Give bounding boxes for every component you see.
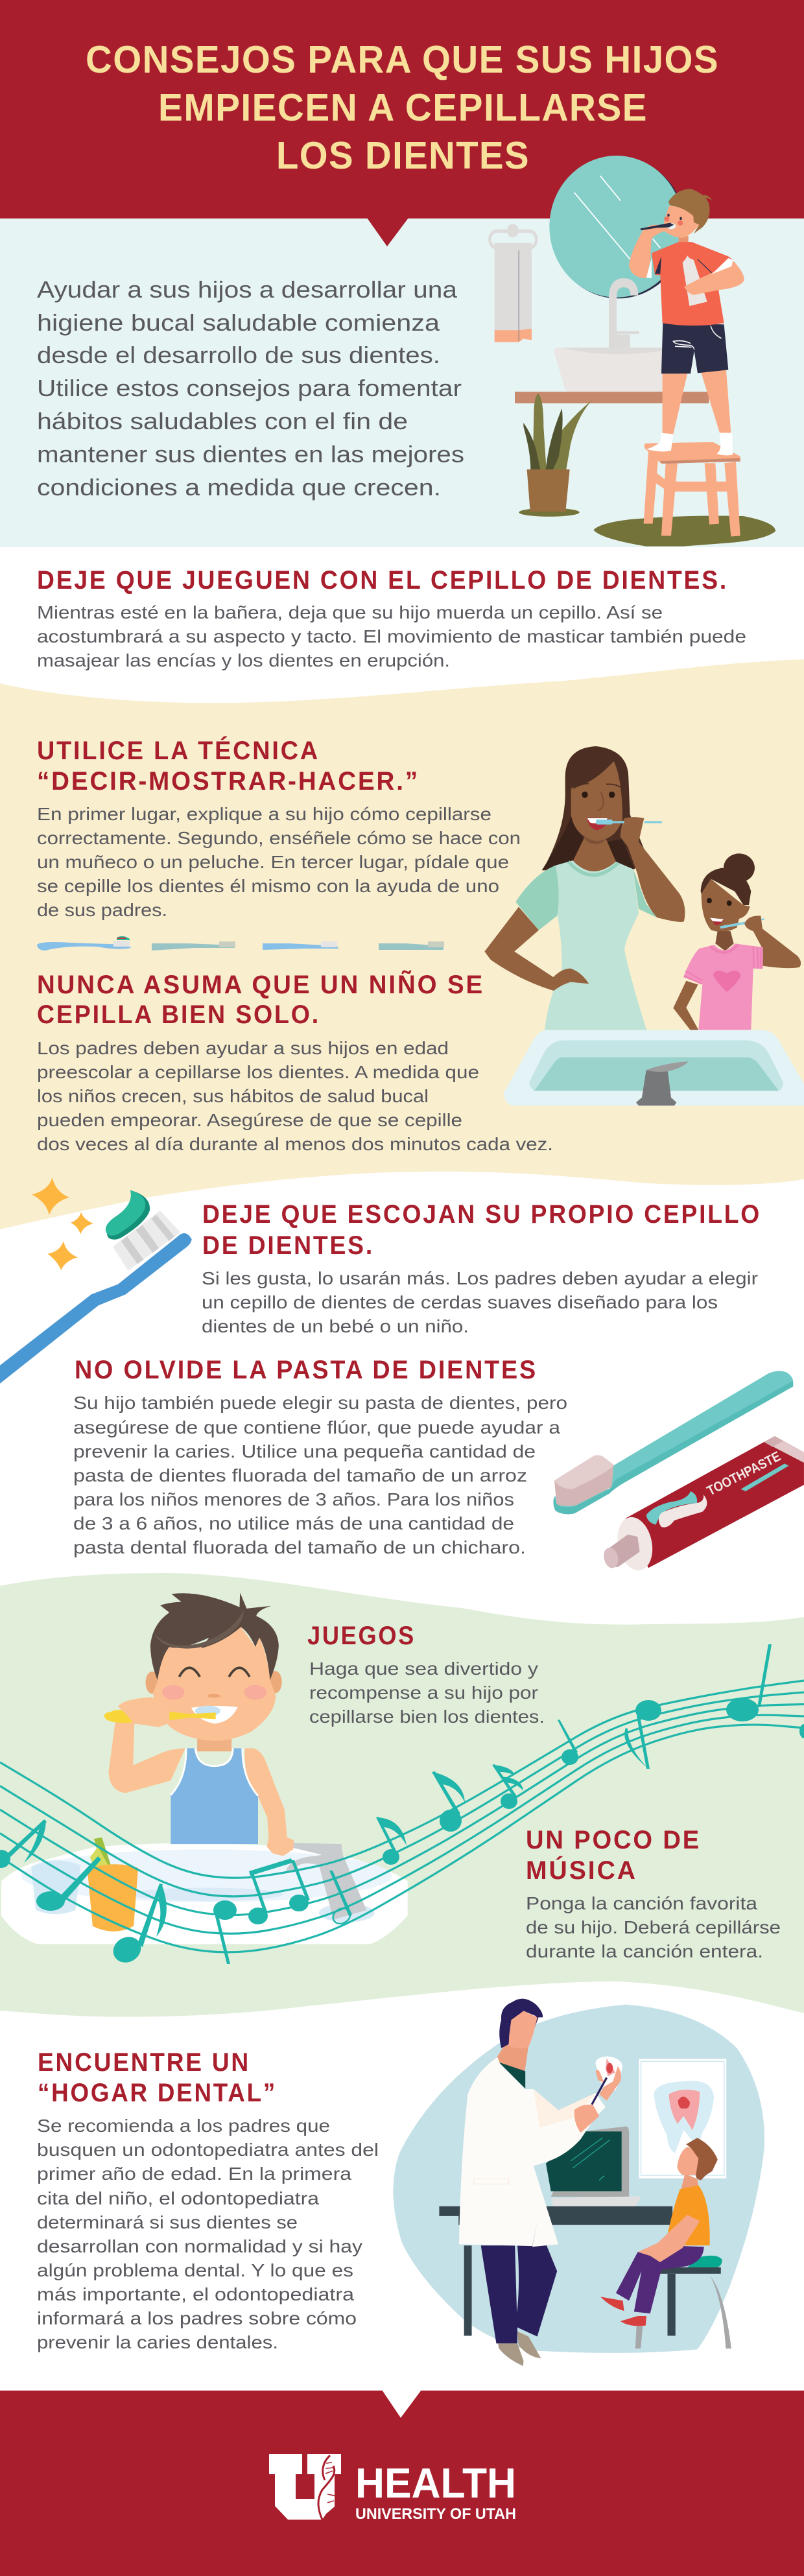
text block: pasta dental fluorada del tamaño de un chicharo. bbox=[73, 1537, 526, 1557]
intro text: higiene bucal saludable comienza bbox=[37, 309, 440, 336]
music notes bbox=[0, 1644, 804, 1967]
character: child on stool bbox=[600, 2138, 731, 2348]
text block: prevenir la caries dentales. bbox=[37, 2332, 278, 2352]
character: dentist bbox=[459, 1999, 622, 2366]
illustration: mother and daughter brushing at sink bbox=[484, 746, 804, 1105]
logo: HEALTH wordmark: HEALTH bbox=[355, 2459, 516, 2507]
panel: don't forget the toothpaste bbox=[73, 1356, 567, 1557]
heading bbox=[526, 1826, 701, 1885]
heading: UTILICE LA TÉCNICA bbox=[37, 736, 320, 765]
text block: más importante, el odontopediatra bbox=[37, 2284, 354, 2304]
text block: primer año de edad. En la primera bbox=[37, 2164, 351, 2184]
text block bbox=[202, 1268, 758, 1336]
text block: cepillarse bien los dientes. bbox=[309, 1707, 545, 1727]
heading: UN POCO DE bbox=[526, 1826, 701, 1854]
text block: determinará si sus dientes se bbox=[37, 2212, 298, 2232]
panel: music bbox=[526, 1826, 781, 1961]
illustration: boy brushing at bathroom mirror bbox=[490, 156, 775, 547]
text block bbox=[37, 2116, 379, 2352]
text block: masajear las encías y los dientes en erupción. bbox=[37, 650, 450, 670]
title: EMPIECEN A CEPILLARSE bbox=[158, 86, 648, 129]
illustration: dentist showing tooth to child bbox=[393, 1999, 764, 2366]
text block: En primer lugar, explique a su hijo cómo cepillarse bbox=[37, 804, 491, 824]
heading: DE DIENTES. bbox=[202, 1231, 374, 1260]
text block: pasta de dientes fluorada del tamaño de un arroz bbox=[73, 1465, 527, 1485]
text block: Su hijo también puede elegir su pasta de dientes, pero bbox=[73, 1393, 567, 1413]
text block: informará a los padres sobre cómo bbox=[37, 2308, 357, 2328]
icon: stool bbox=[644, 442, 740, 537]
panel: tell-show-do bbox=[37, 736, 521, 920]
intro text: condiciones a medida que crecen. bbox=[37, 474, 441, 501]
heading: CEPILLA BIEN SOLO. bbox=[37, 1000, 320, 1029]
text block: asegúrese de que contiene flúor, que puede ayudar a bbox=[73, 1417, 560, 1437]
text block bbox=[526, 1893, 781, 1961]
text block: los niños crecen, sus hábitos de salud bucal bbox=[37, 1086, 429, 1106]
text block: busquen un odontopediatra antes del bbox=[37, 2140, 379, 2160]
title: LOS DIENTES bbox=[276, 134, 530, 177]
heading: DEJE QUE ESCOJAN SU PROPIO CEPILLO bbox=[202, 1200, 761, 1229]
logo: HEALTH wordmark: UNIVERSITY OF UTAH bbox=[355, 2505, 516, 2523]
character: mother bbox=[484, 746, 685, 1030]
illustration: boy brushing at sink bbox=[1, 1592, 408, 1944]
heading bbox=[38, 2048, 277, 2107]
text block bbox=[37, 602, 746, 670]
text block: recompense a su hijo por bbox=[309, 1683, 538, 1703]
panel: intro background bbox=[0, 219, 804, 547]
text block: Ponga la canción favorita bbox=[526, 1893, 757, 1913]
icon: teal toothbrush bbox=[553, 1371, 793, 1514]
heading: NO OLVIDE LA PASTA DE DIENTES bbox=[75, 1356, 538, 1384]
heading bbox=[37, 969, 484, 1029]
text block: un muñeco o un peluche. En tercer lugar, pídale que bbox=[37, 852, 509, 872]
text block: Los padres deben ayudar a sus hijos en edad bbox=[37, 1038, 449, 1058]
title: CONSEJOS PARA QUE SUS HIJOS bbox=[86, 38, 719, 81]
intro text bbox=[37, 276, 464, 501]
icon: poster with tooth bbox=[639, 2059, 726, 2179]
heading: NUNCA ASUMA QUE UN NIÑO SE bbox=[37, 969, 484, 999]
text block: un cepillo de dientes de cerdas suaves diseñado para los bbox=[202, 1292, 718, 1312]
chart: music staff and notes bbox=[0, 1644, 804, 1967]
text block: de su hijo. Deberá cepillárse bbox=[526, 1917, 781, 1937]
panel: games bbox=[307, 1622, 545, 1727]
text block: desarrollan con normalidad y si hay bbox=[37, 2236, 362, 2256]
panel: choose your toothbrush bbox=[202, 1200, 761, 1336]
heading: “HOGAR DENTAL” bbox=[38, 2079, 277, 2107]
icon: towel bbox=[490, 224, 536, 342]
title bbox=[86, 38, 719, 177]
icon: background blob bbox=[393, 2005, 764, 2353]
text block: durante la canción entera. bbox=[526, 1941, 763, 1961]
panel: footer bbox=[0, 2390, 804, 2576]
intro text: Ayudar a sus hijos a desarrollar una bbox=[37, 276, 458, 303]
icon: sparkles bbox=[32, 1177, 93, 1270]
text block: Haga que sea divertido y bbox=[309, 1659, 538, 1679]
text block: correctamente. Segundo, enséñele cómo se hace con bbox=[37, 828, 521, 848]
heading: DEJE QUE JUEGUEN CON EL CEPILLO DE DIENTES. bbox=[37, 566, 728, 595]
heading: MÚSICA bbox=[526, 1855, 637, 1885]
icons: row of small toothbrushes bbox=[37, 936, 444, 951]
text block: preescolar a cepillarse los dientes. A medida que bbox=[37, 1062, 479, 1082]
text block: Si les gusta, lo usarán más. Los padres deben ayudar a elegir bbox=[202, 1268, 758, 1288]
heading bbox=[37, 736, 420, 796]
icon: sink bbox=[504, 1030, 804, 1105]
panel: green wave background bbox=[0, 1573, 804, 2017]
text on tube: TOOTHPASTE bbox=[705, 1449, 783, 1498]
heading: ENCUENTRE UN bbox=[38, 2048, 250, 2077]
heading: “DECIR-MOSTRAR-HACER.” bbox=[37, 767, 420, 796]
text block: dientes de un bebé o un niño. bbox=[202, 1316, 469, 1336]
text block bbox=[37, 804, 521, 920]
text block: pueden empeorar. Asegúrese de que se cepille bbox=[37, 1110, 462, 1130]
panel: find a dental home bbox=[37, 2048, 379, 2352]
text block: cita del niño, el odontopediatra bbox=[37, 2188, 319, 2208]
icon: potted plant bbox=[519, 394, 592, 517]
panel: play with the toothbrush bbox=[37, 566, 746, 670]
text block bbox=[37, 1038, 553, 1154]
text block: prevenir la caries. Utilice una pequeña cantidad de bbox=[73, 1441, 536, 1461]
intro text: Utilice estos consejos para fomentar bbox=[37, 375, 462, 401]
illustration: blue toothbrush with sparkles bbox=[0, 1177, 192, 1384]
intro text: mantener sus dientes en las mejores bbox=[37, 441, 464, 467]
text block: para los niños menores de 3 años. Para los niños bbox=[73, 1489, 514, 1509]
icon: laptop and table bbox=[439, 2126, 672, 2335]
text block: Mientras esté en la bañera, deja que su hijo muerda un cepillo. Así se bbox=[37, 602, 663, 622]
text block: de 3 a 6 años, no utilice más de una cantidad de bbox=[73, 1513, 514, 1533]
intro text: hábitos saludables con el fin de bbox=[37, 408, 408, 434]
icon: toothpaste tube bbox=[602, 1436, 804, 1574]
icon: toothpaste blob bbox=[106, 1190, 150, 1240]
text block: de sus padres. bbox=[37, 900, 167, 920]
text block bbox=[309, 1659, 545, 1727]
panel: never assume bbox=[37, 969, 553, 1154]
character: boy bbox=[104, 1592, 294, 1856]
character: boy bbox=[629, 189, 744, 455]
text block: algún problema dental. Y lo que es bbox=[37, 2260, 353, 2280]
icon: bristles bbox=[113, 1211, 180, 1271]
text block: acostumbrará a su aspecto y tacto. El movimiento de masticar también puede bbox=[37, 626, 746, 646]
heading: JUEGOS bbox=[307, 1622, 416, 1650]
intro text: desde el desarrollo de sus dientes. bbox=[37, 342, 440, 368]
icon: sink and shelf bbox=[515, 283, 709, 403]
icon: ground shadow bbox=[593, 516, 775, 547]
music staff lines bbox=[0, 1681, 804, 1952]
illustration: teal toothbrush and toothpaste tube bbox=[553, 1371, 804, 1574]
character: daughter bbox=[673, 853, 801, 1039]
text block: dos veces al día durante al menos dos minutos cada vez. bbox=[37, 1134, 553, 1154]
icon: toothbrush handle bbox=[0, 1233, 192, 1384]
text block: se cepille los dientes él mismo con la ayuda de uno bbox=[37, 876, 499, 896]
heading bbox=[202, 1200, 761, 1260]
panel: cream wave background bbox=[0, 659, 804, 1229]
logo: U with DNA bbox=[269, 2454, 341, 2520]
icon: hollow note bbox=[330, 1905, 353, 1927]
icon: mirror bbox=[549, 156, 685, 298]
panel: header bbox=[0, 0, 804, 246]
icon: sink with cup and glass bbox=[1, 1837, 408, 1944]
text block bbox=[73, 1393, 567, 1557]
text block: Se recomienda a los padres que bbox=[37, 2116, 330, 2136]
